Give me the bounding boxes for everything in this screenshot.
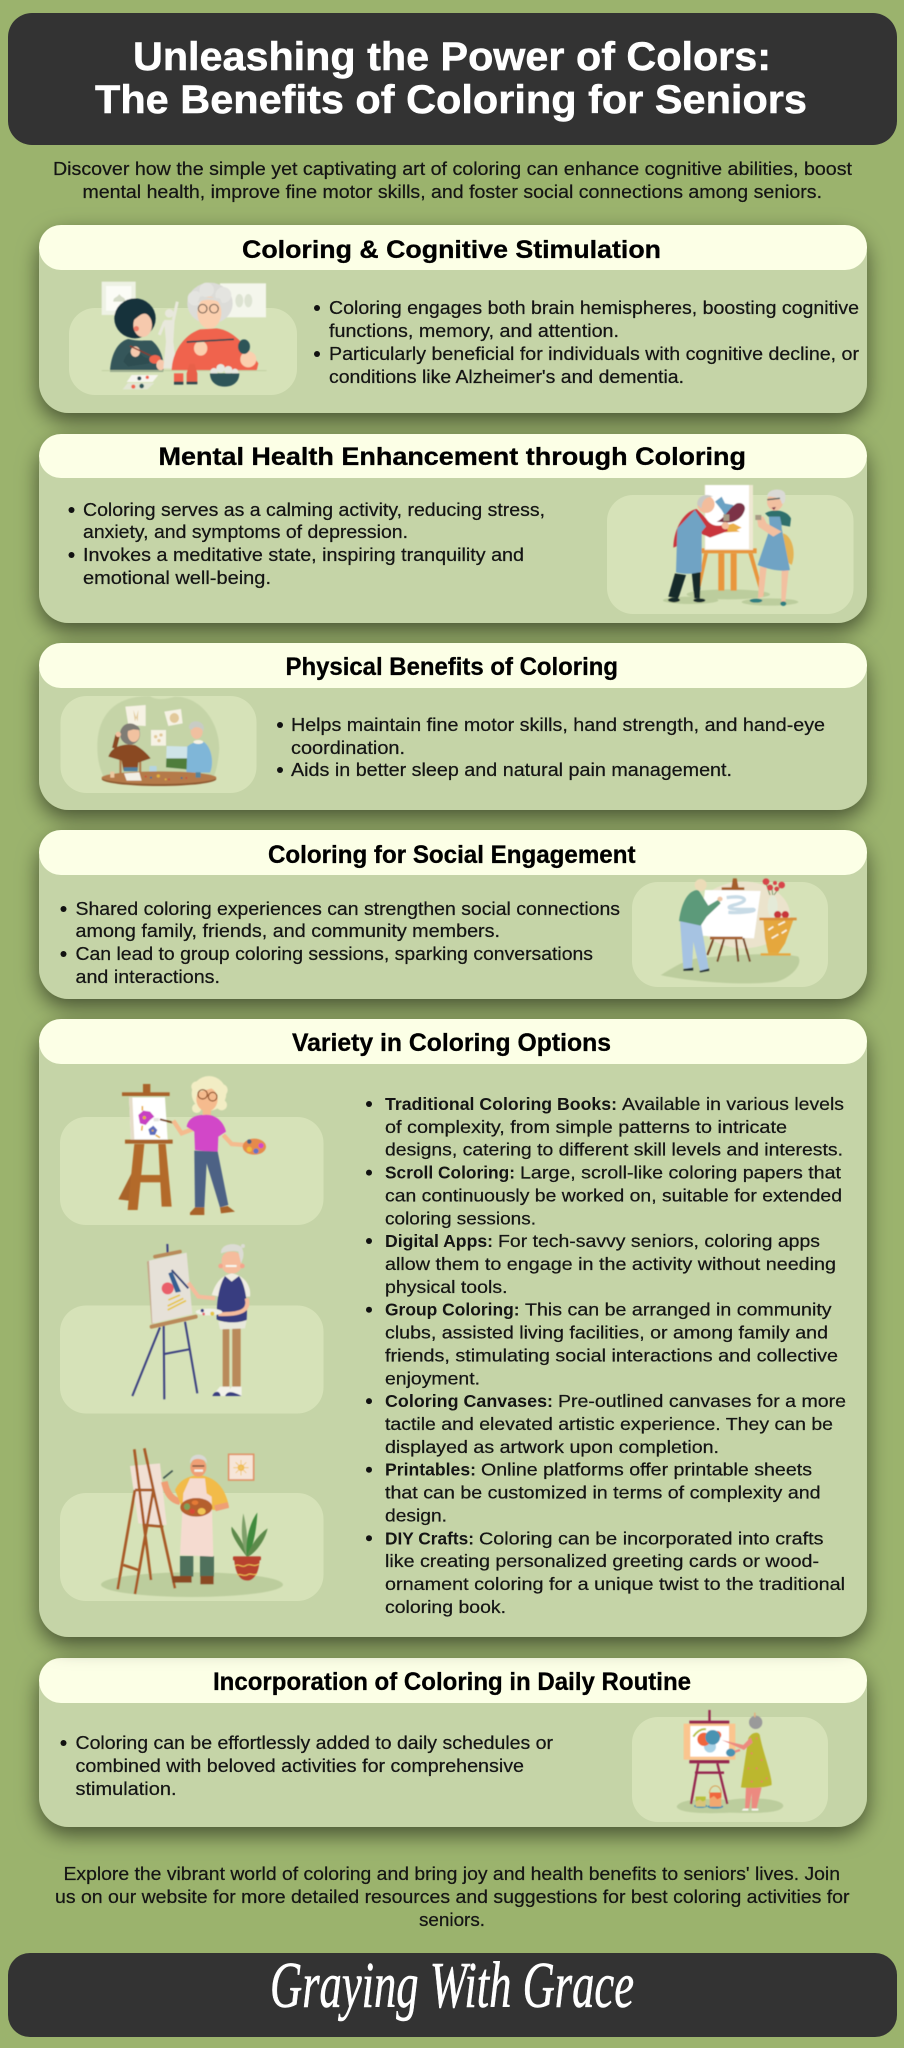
option: traditional coloring books: Traditional Coloring Books:: [385, 1094, 617, 1114]
panel: social engagement: [39, 830, 867, 999]
option: traditional coloring books: [366, 1094, 844, 1160]
bullet list: coordination.: [291, 738, 405, 758]
bullet list: [314, 298, 859, 387]
option: coloring canvases: tactile and elevated artistic experience. They can be: [385, 1414, 833, 1434]
option: group coloring: This can be arranged in community: [525, 1300, 832, 1320]
option: scroll coloring: [366, 1163, 842, 1228]
option: scroll coloring: coloring sessions.: [385, 1208, 536, 1228]
option: printables: [366, 1460, 821, 1525]
footer banner: [8, 1949, 897, 2037]
option: printables: Printables:: [385, 1460, 476, 1480]
bullet list: Invokes a meditative state, inspiring tranquility and: [83, 545, 524, 565]
closing text: us on our website for more detailed resources and suggestions for best coloring activities for: [55, 1887, 850, 1907]
bullet list: Coloring can be effortlessly added to daily schedules or: [76, 1733, 553, 1753]
title banner: [8, 13, 897, 145]
option: traditional coloring books: Available in various levels: [622, 1094, 844, 1114]
closing text: Explore the vibrant world of coloring and bring joy and health benefits to seniors' lives. Join: [64, 1864, 840, 1884]
panel heading: [39, 434, 867, 478]
option: scroll coloring: Large, scroll-like coloring papers that: [520, 1163, 841, 1183]
bullet list: Helps maintain fine motor skills, hand strength, and hand-eye: [291, 715, 825, 735]
option: digital apps: [366, 1231, 836, 1297]
option: digital apps: Digital Apps:: [385, 1231, 493, 1251]
bullet list: and interactions.: [76, 967, 220, 987]
bullet list: Shared coloring experiences can strengthen social connections: [76, 899, 620, 919]
bullet list: Coloring engages both brain hemispheres, boosting cognitive: [329, 298, 859, 318]
option: scroll coloring: can continuously be worked on, suitable for extended: [385, 1185, 842, 1205]
bullet list: stimulation.: [76, 1779, 176, 1799]
panel heading: [39, 1658, 867, 1703]
option: diy crafts: coloring book.: [385, 1597, 506, 1617]
panel: mental health enhancement: [39, 434, 867, 623]
illustration: man painting on canvas: [632, 878, 828, 987]
panel heading: [39, 643, 867, 688]
bullet list: Can lead to group coloring sessions, sparking conversations: [76, 944, 593, 964]
option: digital apps: For tech-savvy seniors, coloring apps: [498, 1231, 820, 1251]
bullet list: [277, 715, 825, 780]
panel heading: Physical Benefits of Coloring: [286, 653, 618, 681]
illustration: couple painting at easel: [607, 485, 854, 614]
closing text: [55, 1864, 850, 1930]
panel heading: [39, 225, 867, 270]
option: diy crafts: DIY Crafts:: [385, 1528, 474, 1548]
option: scroll coloring: Scroll Coloring:: [385, 1163, 515, 1183]
panel heading: Incorporation of Coloring in Daily Routine: [213, 1668, 691, 1696]
illustration: seniors painting at a table: [60, 696, 256, 793]
option: coloring canvases: [366, 1391, 846, 1457]
intro text: mental health, improve fine motor skills, and foster social connections among seniors.: [82, 182, 822, 202]
bullet list: emotional well-being.: [83, 568, 271, 588]
bullet list: [60, 1733, 553, 1799]
option: group coloring: Group Coloring:: [385, 1300, 520, 1320]
illustration: man in vest at easel: [60, 1244, 324, 1414]
option: diy crafts: [366, 1528, 845, 1617]
panel: variety in coloring options: [39, 1019, 867, 1637]
illustration: woman with palette at easel: [60, 1076, 324, 1225]
bullet list: Aids in better sleep and natural pain management.: [291, 760, 732, 780]
footer banner: Graying With Grace: [270, 1949, 634, 2022]
intro text: [53, 159, 852, 202]
option: coloring canvases: Pre-outlined canvases for a more: [558, 1391, 846, 1411]
illustration: woman in yellow dress painting: [632, 1710, 828, 1822]
panel heading: Coloring for Social Engagement: [268, 841, 636, 869]
option: diy crafts: like creating personalized greeting cards or wood-: [385, 1551, 819, 1571]
closing text: seniors.: [419, 1910, 485, 1930]
option: printables: Online platforms offer printable sheets: [481, 1460, 812, 1480]
option: coloring canvases: displayed as artwork upon completion.: [385, 1437, 719, 1457]
illustration: two women painting eggs: [69, 282, 297, 395]
option: diy crafts: Coloring can be incorporated into crafts: [479, 1528, 824, 1548]
panel heading: Variety in Coloring Options: [292, 1029, 611, 1057]
bullet list: anxiety, and symptoms of depression.: [83, 522, 408, 542]
option: traditional coloring books: designs, catering to different skill levels and interests.: [385, 1140, 843, 1160]
panel: coloring and cognitive stimulation: [39, 225, 867, 413]
illustration: man with apron and plant: [60, 1448, 324, 1601]
options list: [366, 1094, 846, 1617]
panel: daily routine: [39, 1658, 867, 1827]
option: group coloring: clubs, assisted living facilities, or among family and: [385, 1323, 828, 1343]
option: group coloring: enjoyment.: [385, 1368, 480, 1388]
option: group coloring: friends, stimulating social interactions and collective: [385, 1345, 838, 1365]
bullet list: among family, friends, and community members.: [76, 921, 500, 941]
panel heading: Coloring & Cognitive Stimulation: [242, 236, 661, 264]
option: digital apps: physical tools.: [385, 1277, 508, 1297]
panel heading: [39, 830, 867, 875]
bullet list: combined with beloved activities for comprehensive: [76, 1756, 524, 1776]
panel heading: [39, 1019, 867, 1064]
bullet list: Coloring serves as a calming activity, reducing stress,: [83, 500, 545, 520]
panel heading: Mental Health Enhancement through Coloring: [158, 443, 746, 471]
title banner: The Benefits of Coloring for Seniors: [95, 78, 807, 122]
title banner: Unleashing the Power of Colors:: [133, 35, 771, 79]
option: diy crafts: ornament coloring for a unique twist to the traditional: [385, 1574, 845, 1594]
panel: physical benefits: [39, 643, 867, 810]
option: printables: that can be customized in terms of complexity and: [385, 1483, 821, 1503]
bullet list: [68, 500, 545, 588]
option: digital apps: allow them to engage in the activity without needing: [385, 1254, 836, 1274]
bullet list: Particularly beneficial for individuals with cognitive decline, or: [329, 344, 859, 364]
intro text: Discover how the simple yet captivating art of coloring can enhance cognitive abilities, boost: [53, 159, 852, 179]
option: traditional coloring books: of complexity, from simple patterns to intricate: [385, 1117, 787, 1137]
option: group coloring: [366, 1300, 838, 1388]
option: coloring canvases: Coloring Canvases:: [385, 1391, 553, 1411]
bullet list: functions, memory, and attention.: [329, 321, 619, 341]
option: printables: design.: [385, 1505, 447, 1525]
bullet list: [60, 899, 620, 987]
bullet list: conditions like Alzheimer's and dementia.: [329, 367, 684, 387]
